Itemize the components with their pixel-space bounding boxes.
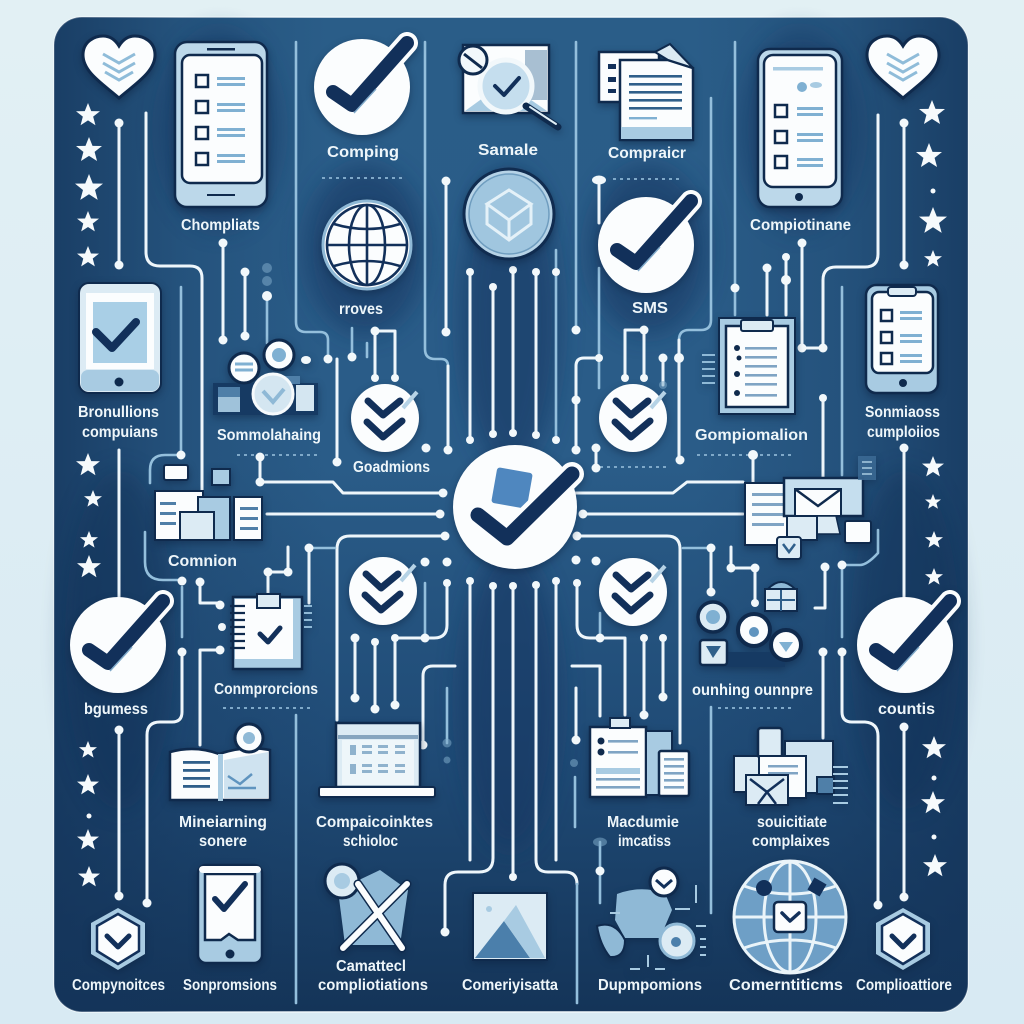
text labels: Compaicoinktes bbox=[316, 814, 433, 831]
text labels: schioloc bbox=[343, 833, 398, 850]
text labels: Dupmpomions bbox=[598, 977, 702, 994]
icon: phone checklist right bbox=[758, 49, 842, 207]
text labels: Samale bbox=[478, 142, 538, 159]
icon: open book with pin bbox=[170, 724, 270, 801]
icon: check circle right bbox=[857, 597, 953, 693]
text labels: Macdumie bbox=[607, 814, 679, 831]
text labels bbox=[72, 142, 952, 994]
text labels: countis bbox=[878, 701, 935, 718]
text labels: Comping bbox=[327, 144, 399, 161]
text labels: Sonpromsions bbox=[183, 977, 277, 994]
icon: phone checklist left bbox=[175, 42, 267, 207]
icon: crossed tools with magnifier bbox=[325, 864, 408, 948]
text labels: Gompiomalion bbox=[695, 427, 808, 444]
text labels: Compraicr bbox=[608, 145, 686, 162]
icon: tablet with check bbox=[79, 283, 161, 393]
text labels: Comnion bbox=[168, 553, 237, 570]
icon: chevron circle upper right bbox=[599, 384, 667, 452]
icon: chevron circle upper left bbox=[351, 384, 419, 452]
text labels: Mineiarning bbox=[179, 814, 267, 831]
text labels: SMS bbox=[632, 300, 668, 317]
icon: blue emblem circle bbox=[464, 169, 554, 259]
text labels: complaixes bbox=[752, 833, 830, 850]
text labels: Camattecl bbox=[336, 958, 406, 975]
stars: left column bbox=[75, 103, 103, 886]
icon: globe bbox=[323, 201, 411, 289]
icon: email monitor cluster bbox=[745, 456, 876, 559]
text labels: Compynoitces bbox=[72, 977, 165, 994]
text labels: Complioattiore bbox=[856, 977, 952, 994]
icon: check circle top right bbox=[598, 197, 694, 293]
icon: check circle left bbox=[70, 597, 166, 693]
icon: notebook with check bbox=[230, 594, 312, 669]
icon: phone checklist far right bbox=[866, 285, 938, 393]
icon: document stack bbox=[599, 44, 693, 140]
icon: chevron circle lower left bbox=[349, 557, 417, 625]
icon: shield right bbox=[876, 908, 930, 970]
text labels: Conmprorcions bbox=[214, 681, 318, 698]
text labels: rroves bbox=[339, 301, 383, 318]
text labels: bgumess bbox=[84, 701, 148, 718]
text labels: compuians bbox=[82, 424, 158, 441]
stars: right column bbox=[916, 100, 947, 876]
text labels: ounhing ounnpre bbox=[692, 682, 813, 699]
text labels: sonere bbox=[199, 833, 247, 850]
text labels: Sonmiaoss bbox=[865, 404, 940, 421]
icon: heart right bbox=[867, 36, 939, 98]
icon: check circle top left bbox=[314, 39, 410, 135]
icon: central check badge bbox=[453, 445, 577, 569]
text labels: Sommolahaing bbox=[217, 427, 321, 444]
icon: media windows cluster bbox=[734, 728, 848, 805]
icon: circles cluster right bbox=[698, 582, 801, 667]
text labels: Comerntiticms bbox=[729, 977, 843, 994]
icon: heart left bbox=[83, 36, 155, 98]
icon: chevron circle lower right bbox=[599, 558, 667, 626]
text labels: imcatiss bbox=[618, 833, 671, 850]
icon: image square bbox=[473, 893, 547, 960]
text labels: Chompliats bbox=[181, 217, 260, 234]
text labels: compliotiations bbox=[318, 977, 428, 994]
icon: circles cluster left bbox=[213, 340, 318, 415]
text labels: Goadmions bbox=[353, 459, 430, 476]
connector lines bbox=[114, 42, 908, 1003]
icon: clipboard list bbox=[702, 318, 795, 414]
icon: document cluster left bbox=[155, 465, 262, 540]
icon: map cluster with pins bbox=[597, 868, 706, 969]
icon: sample document with magnifier bbox=[459, 45, 558, 127]
text labels: Compiotinane bbox=[750, 217, 851, 234]
text labels: souicitiate bbox=[757, 814, 827, 831]
icon: blue globe bbox=[734, 861, 846, 973]
icon: laptop bbox=[319, 723, 435, 797]
icon: clipboard with documents bbox=[590, 718, 689, 797]
icon: phone with check bottom bbox=[198, 865, 262, 963]
icon: shield left bbox=[91, 908, 145, 970]
text labels: cumploiios bbox=[867, 424, 940, 441]
text labels: Comeriyisatta bbox=[462, 977, 558, 994]
text labels: Bronullions bbox=[78, 404, 159, 421]
